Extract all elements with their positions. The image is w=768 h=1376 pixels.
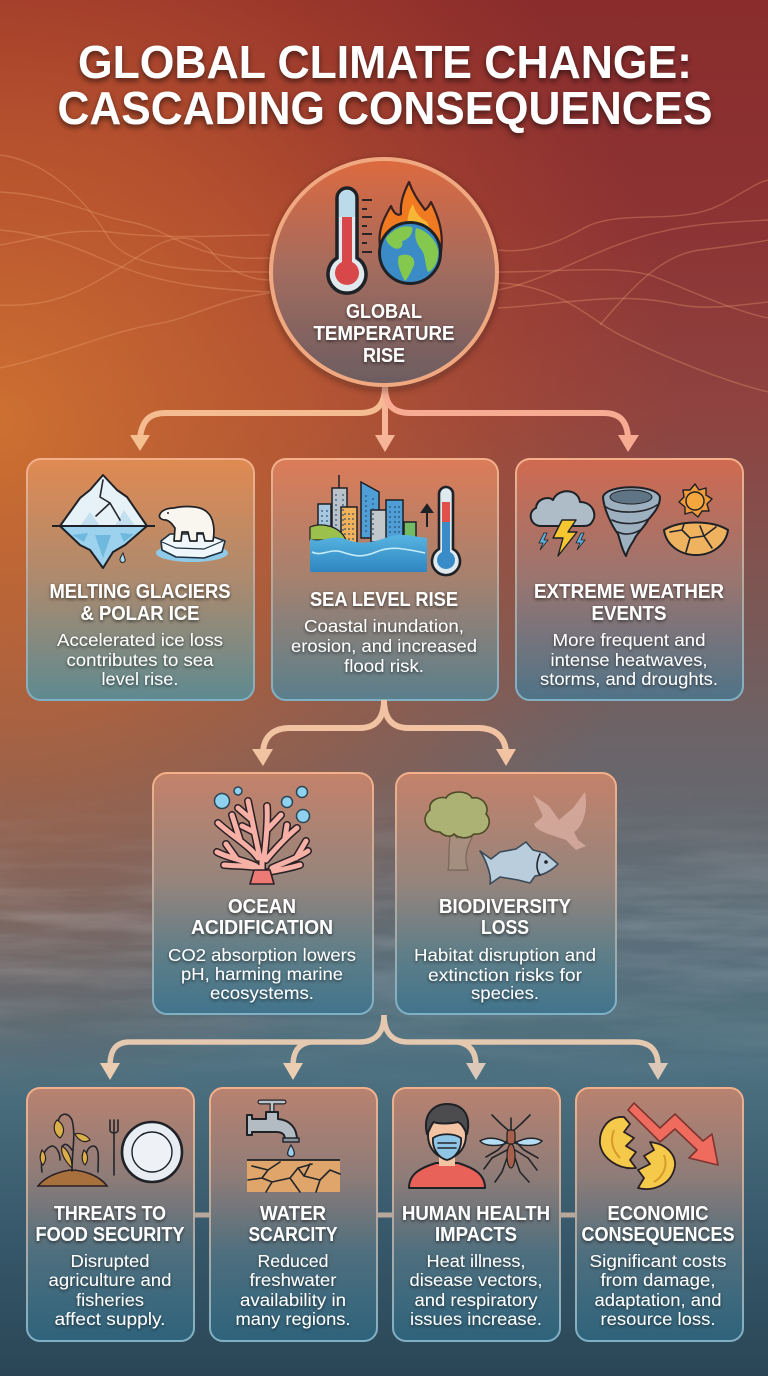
panel: global temperature rise — [271, 159, 497, 385]
description: Reduced — [258, 1251, 328, 1271]
description: Coastal inundation, — [304, 616, 464, 636]
heading: FOOD SECURITY — [36, 1224, 185, 1246]
description: storms, and droughts. — [540, 669, 718, 689]
arrows: second tier to third tier — [100, 1015, 668, 1080]
description: availability in — [240, 1290, 346, 1310]
icon: flooded city and thermometer — [310, 475, 460, 575]
heading: SEA LEVEL RISE — [310, 589, 458, 611]
description — [540, 630, 718, 689]
description: adaptation, and — [594, 1290, 722, 1310]
description — [236, 1251, 350, 1329]
description: fisheries — [76, 1290, 144, 1310]
description: More frequent and — [552, 630, 706, 650]
heading: & POLAR ICE — [80, 603, 200, 625]
description — [168, 945, 356, 1003]
description: and respiratory — [414, 1290, 538, 1310]
heading: ECONOMIC — [608, 1203, 708, 1225]
panel: economic consequences — [576, 1088, 743, 1341]
description: erosion, and increased — [291, 636, 477, 656]
heading: EXTREME WEATHER — [534, 581, 725, 603]
links between third-tier panels — [194, 1212, 575, 1218]
description: freshwater — [250, 1270, 337, 1290]
icon: iceberg and polar bear — [52, 475, 228, 568]
description: species. — [471, 983, 539, 1003]
panel: sea level rise — [272, 459, 498, 700]
icon: dripping tap over cracked ground — [247, 1102, 340, 1192]
icon: wilted crops and plate — [38, 1114, 182, 1186]
heading — [50, 581, 230, 625]
description — [410, 1251, 542, 1329]
icon: coral and bubbles — [214, 786, 310, 884]
description: intense heatwaves, — [550, 650, 708, 670]
panel: biodiversity loss — [396, 773, 616, 1014]
description: agriculture and — [48, 1270, 172, 1290]
description — [48, 1251, 172, 1329]
description: affect supply. — [54, 1309, 166, 1329]
heading: CONSEQUENCES — [582, 1224, 734, 1246]
label: global temperature rise: RISE — [363, 345, 405, 367]
heading: HUMAN HEALTH — [402, 1203, 550, 1225]
heading: MELTING GLACIERS — [50, 581, 230, 603]
icon: tree, dove, fish — [425, 792, 586, 884]
heading — [191, 896, 333, 939]
description: Habitat disruption and — [414, 945, 596, 965]
heading — [248, 1203, 338, 1246]
description: from damage, — [600, 1270, 716, 1290]
heading: BIODIVERSITY — [439, 896, 572, 918]
description: pH, harming marine — [181, 964, 343, 984]
description: disease vectors, — [410, 1270, 542, 1290]
description: issues increase. — [410, 1309, 542, 1329]
arrows: sea level rise to second tier — [252, 700, 516, 766]
heading — [582, 1203, 734, 1246]
panel: threats to food security — [27, 1088, 194, 1341]
heading — [534, 581, 725, 625]
heading: ACIDIFICATION — [191, 917, 333, 939]
description: CO2 absorption lowers — [168, 945, 356, 965]
description: Disrupted — [70, 1251, 150, 1271]
description: resource loss. — [600, 1309, 716, 1329]
heading: THREATS TO — [54, 1203, 166, 1225]
description — [291, 616, 477, 676]
icon: storm, tornado, drought — [531, 484, 728, 556]
label: global temperature rise: GLOBAL — [346, 301, 422, 323]
heading: SCARCITY — [248, 1224, 338, 1246]
panel: human health impacts — [393, 1088, 560, 1341]
description: many regions. — [236, 1309, 350, 1329]
heading — [402, 1203, 550, 1246]
title — [58, 36, 712, 134]
label: global temperature rise — [314, 301, 454, 367]
heading: IMPACTS — [435, 1224, 517, 1246]
icon: burning earth — [379, 182, 442, 284]
heading: WATER — [260, 1203, 327, 1225]
description: ecosystems. — [210, 983, 314, 1003]
panel: water scarcity — [210, 1088, 377, 1341]
description: flood risk. — [344, 656, 424, 676]
heading — [439, 896, 572, 939]
description: extinction risks for — [428, 965, 582, 985]
icon: masked person and mosquito — [409, 1104, 542, 1188]
description: Significant costs — [590, 1251, 727, 1271]
panel: melting glaciers and polar ice — [27, 459, 254, 700]
description: Accelerated ice loss — [57, 630, 223, 650]
arrows: temperature rise to first tier — [130, 386, 639, 452]
heading: EVENTS — [592, 603, 666, 625]
icon: thermometer — [328, 188, 372, 293]
description — [57, 630, 223, 689]
heading: OCEAN — [228, 896, 296, 918]
panel: extreme weather events — [516, 459, 743, 700]
title: GLOBAL CLIMATE CHANGE: — [78, 36, 692, 88]
title: CASCADING CONSEQUENCES — [58, 82, 712, 134]
description — [590, 1251, 727, 1329]
description — [414, 945, 596, 1003]
icon: falling arrow and broken coin — [600, 1103, 718, 1189]
background heat lines — [0, 155, 768, 392]
panel: ocean acidification — [153, 773, 373, 1014]
heading: LOSS — [481, 917, 529, 939]
label: global temperature rise: TEMPERATURE — [314, 323, 454, 345]
description: Heat illness, — [426, 1251, 526, 1271]
description: contributes to sea — [66, 650, 214, 670]
heading — [36, 1203, 185, 1246]
description: level rise. — [102, 669, 178, 689]
